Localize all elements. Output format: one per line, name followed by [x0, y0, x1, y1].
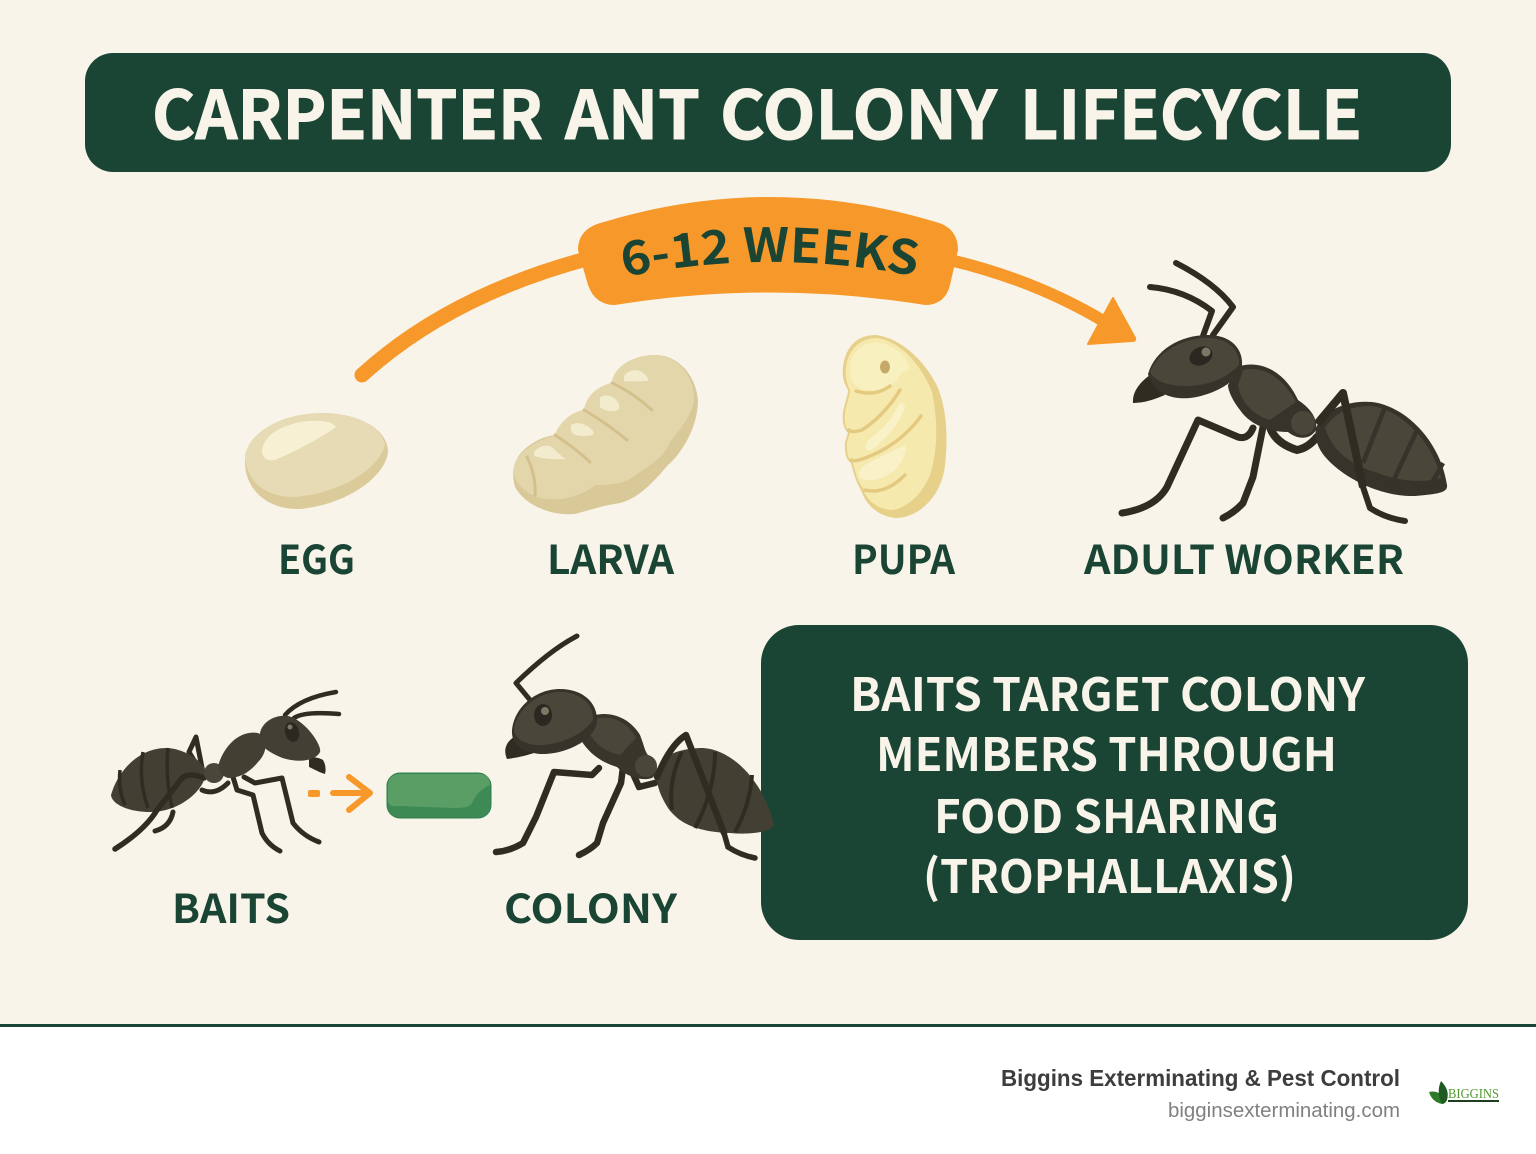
arrow: 6-12 weeks arc from egg to adult	[354, 197, 1136, 382]
label: baits: BAITS	[172, 877, 290, 935]
company name: Biggins Exterminating & Pest Control	[1001, 1065, 1400, 1091]
logo	[1429, 1081, 1499, 1104]
label: colony: COLONY	[504, 877, 678, 935]
title banner: LIFECYCLE	[1020, 62, 1362, 159]
logo: BIGGINS	[1448, 1087, 1499, 1102]
panel: baits target colony note: MEMBERS THROUGH	[876, 719, 1337, 785]
panel: baits target colony note: BAITS TARGET COLONY	[850, 659, 1365, 725]
icon: larva	[513, 355, 698, 514]
label: egg: EGG	[278, 528, 355, 586]
label: adult worker: ADULT WORKER	[1083, 528, 1404, 586]
footer	[0, 1024, 1536, 1154]
icon: bait ant	[111, 692, 339, 851]
arrow: bait flow	[308, 777, 370, 810]
label: larva: LARVA	[547, 528, 674, 586]
icon: adult worker ant	[1122, 263, 1447, 521]
label: pupa: PUPA	[852, 528, 955, 586]
icon: egg	[245, 413, 388, 509]
icon: pupa	[843, 335, 947, 518]
panel: baits target colony note: (TROPHALLAXIS)	[923, 841, 1296, 907]
icon: colony ant	[496, 636, 774, 858]
title banner	[85, 53, 1451, 172]
icon: green bait block	[387, 773, 491, 818]
title banner: ANT	[564, 62, 700, 159]
title banner: CARPENTER	[152, 62, 543, 159]
website: bigginsexterminating.com	[1168, 1100, 1400, 1122]
panel: baits target colony note: FOOD SHARING	[934, 781, 1279, 847]
title banner: COLONY	[720, 62, 998, 159]
arrow: 6-12 weeks arc from egg to adult: 6-12 WEEKS	[622, 227, 918, 275]
panel: baits target colony note	[761, 625, 1468, 940]
